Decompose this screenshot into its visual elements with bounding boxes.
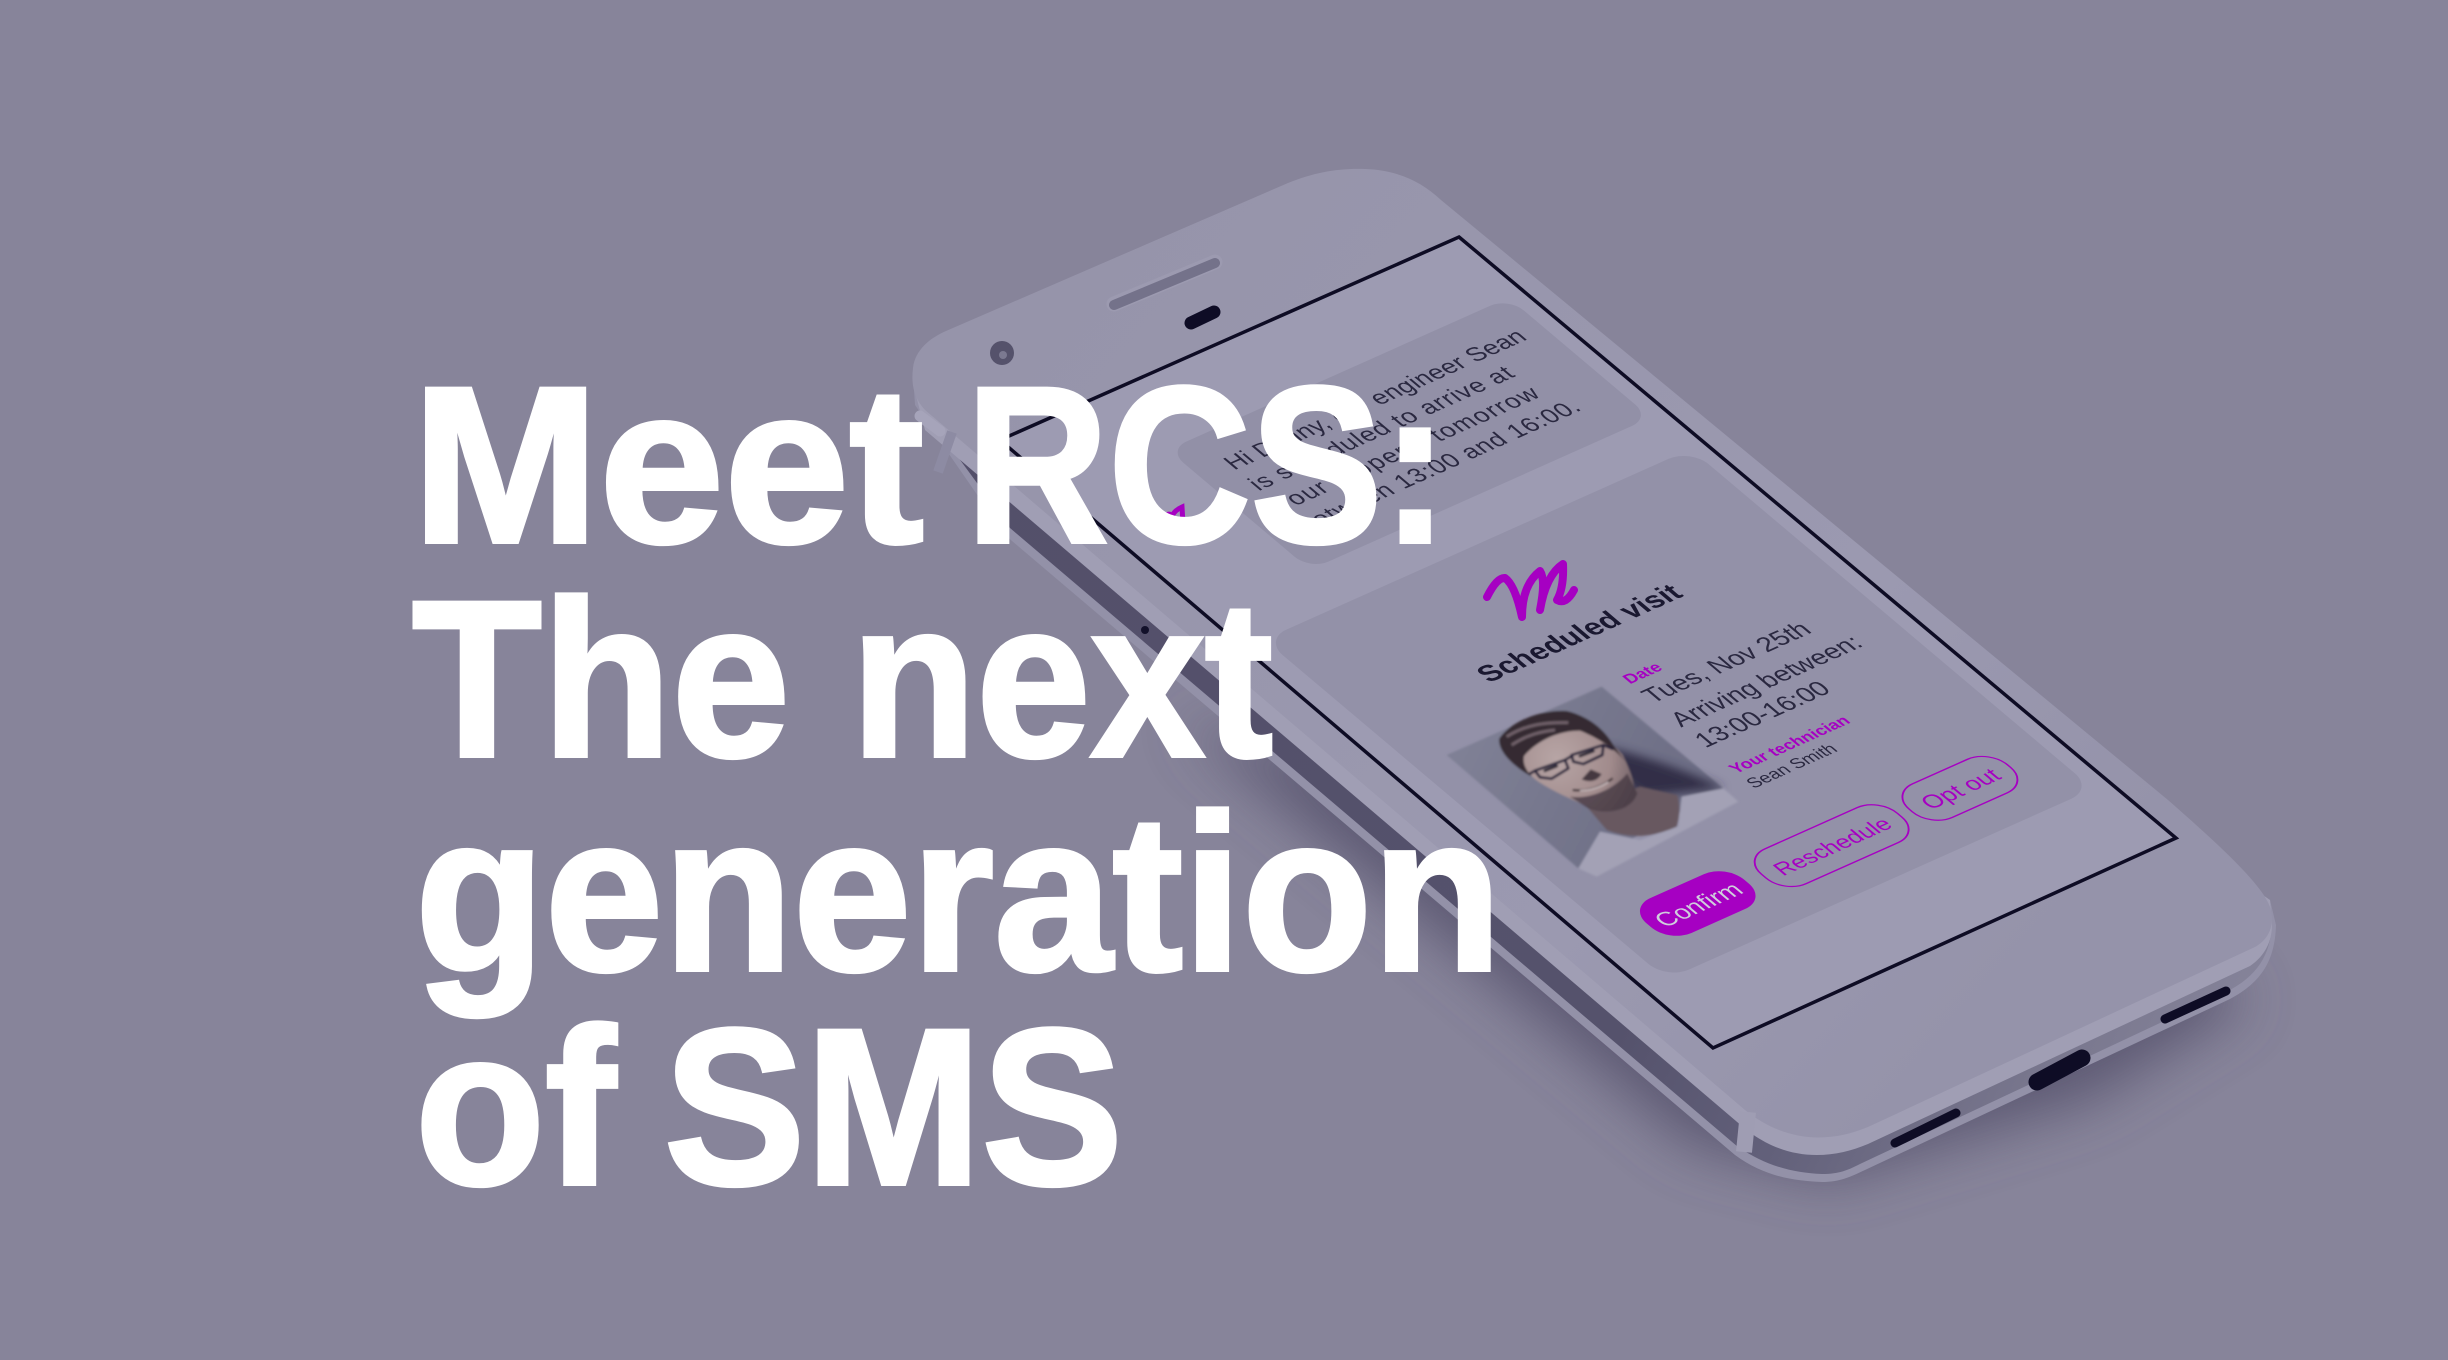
card heading: Scheduled visit bbox=[1470, 580, 1690, 688]
photo backdrop bbox=[1447, 687, 1723, 868]
button: reschedule: Reschedule bbox=[1767, 813, 1898, 879]
antenna line bbox=[938, 432, 952, 472]
face bbox=[1520, 730, 1634, 811]
button: confirm: Confirm bbox=[1648, 878, 1749, 932]
bottom slot left bbox=[1895, 1113, 1956, 1143]
title bbox=[412, 341, 1502, 1232]
phone chamfer bbox=[913, 300, 2272, 1155]
teeth bbox=[1580, 782, 1608, 791]
sender avatar mark bbox=[1162, 507, 1183, 524]
title: SMS bbox=[664, 983, 1123, 1232]
message text: Hi Danny, our engineer Sean bbox=[1218, 326, 1533, 474]
phone bbox=[912, 169, 2276, 1182]
side button highlight bbox=[920, 416, 940, 431]
neck bbox=[1587, 787, 1679, 836]
date details: Arriving between: bbox=[1663, 630, 1869, 731]
date details: 13:00-16:00 bbox=[1687, 676, 1837, 752]
title: RCS: bbox=[966, 341, 1448, 590]
phone side band bbox=[916, 300, 2272, 1174]
button: opt out: Opt out bbox=[1915, 764, 2008, 814]
rich card bbox=[1264, 449, 2093, 979]
date details: Tues, Nov 25th bbox=[1635, 617, 1818, 707]
logo squiggle bbox=[1487, 564, 1574, 617]
beard bbox=[1570, 773, 1637, 811]
message text: is scheduled to arrive at bbox=[1243, 362, 1521, 495]
side hole bbox=[1141, 626, 1149, 634]
message text: between 13:00 and 16:00. bbox=[1292, 396, 1587, 536]
title: The bbox=[412, 555, 790, 804]
button: opt out bbox=[1891, 750, 2029, 827]
bottom slot right bbox=[2165, 991, 2226, 1019]
nose shadow bbox=[1582, 769, 1602, 781]
hair bbox=[1499, 711, 1625, 777]
shirt bbox=[1578, 788, 1738, 877]
message text: your property tomorrow bbox=[1267, 383, 1546, 516]
title: of bbox=[415, 983, 617, 1232]
bottom port bbox=[2037, 1058, 2082, 1082]
hair highlight bbox=[1507, 723, 1568, 745]
title: next bbox=[851, 555, 1273, 804]
message text bbox=[1218, 326, 1606, 536]
screen bbox=[1000, 237, 2176, 1048]
message bubble bbox=[1168, 298, 1651, 570]
corner joint bbox=[1744, 1112, 1748, 1152]
eyes bbox=[1545, 751, 1593, 771]
front sensor bbox=[1191, 312, 1214, 323]
button: reschedule bbox=[1743, 798, 1920, 893]
phone face bbox=[912, 169, 2272, 1137]
phone body rim bbox=[913, 300, 2276, 1182]
technician label: Your technician bbox=[1725, 713, 1854, 776]
front camera bbox=[990, 341, 1014, 365]
mouth bbox=[1573, 778, 1613, 790]
speaker grille bbox=[1114, 262, 1215, 305]
screen content bbox=[1084, 297, 2093, 979]
title: Meet bbox=[412, 341, 924, 590]
photo shadow bbox=[1607, 747, 1723, 797]
phone shadow bbox=[1180, 720, 2250, 1180]
technician photo bbox=[1447, 687, 1738, 877]
technician name: Sean Smith bbox=[1742, 740, 1842, 791]
button: confirm bbox=[1628, 864, 1767, 943]
date label: Date bbox=[1619, 660, 1667, 687]
glasses bbox=[1529, 745, 1613, 779]
date details bbox=[1635, 606, 1894, 752]
title: generation bbox=[415, 769, 1502, 1018]
